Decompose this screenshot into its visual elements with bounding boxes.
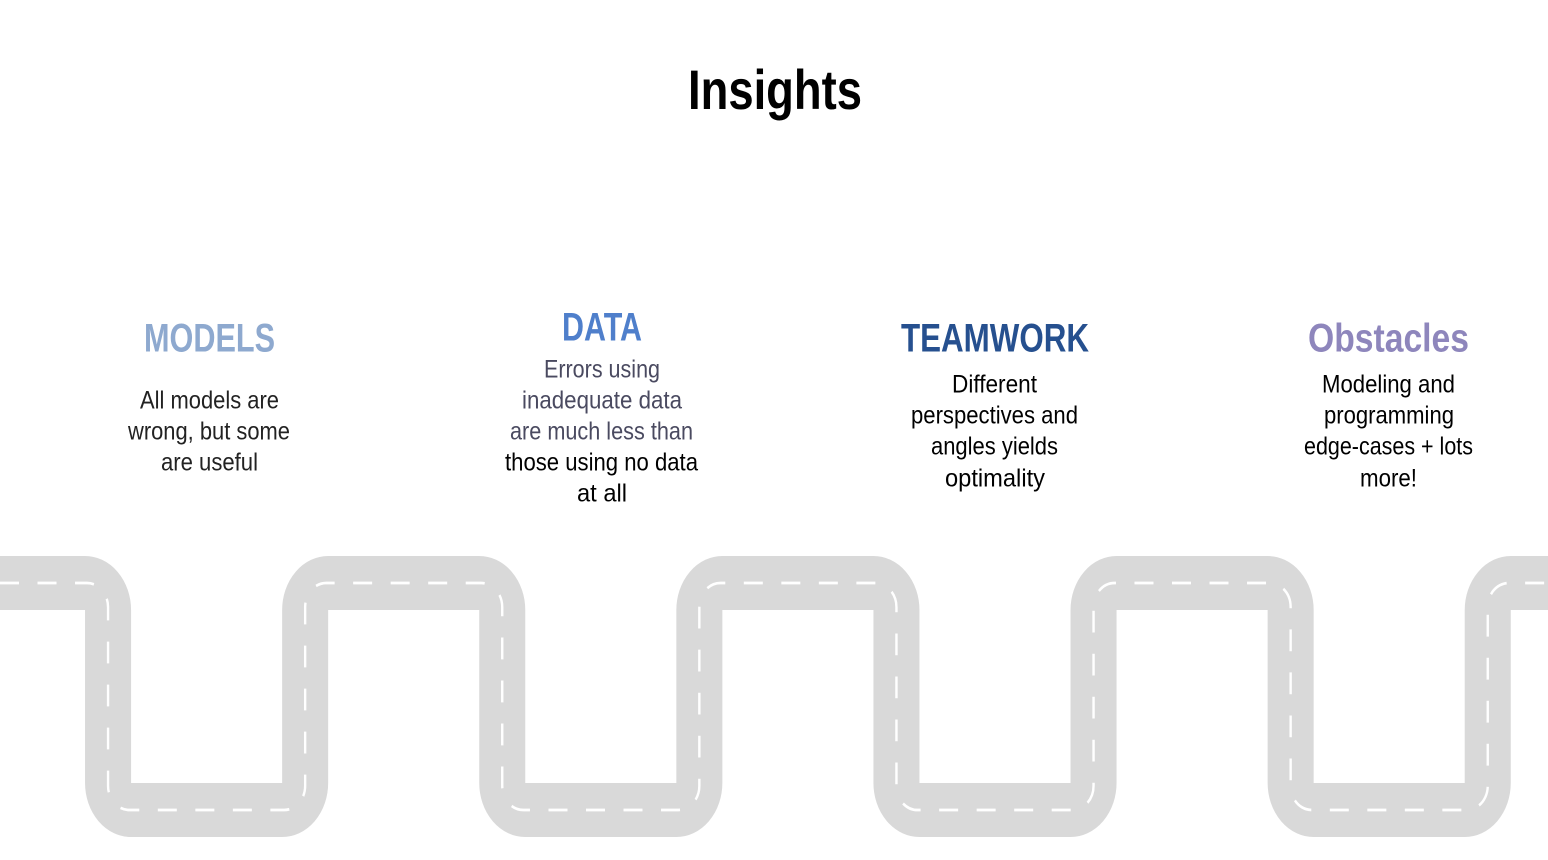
winding road <box>0 583 1548 810</box>
text block: models: are useful <box>161 448 258 476</box>
text block: obstacles <box>1304 370 1473 492</box>
text block: models <box>127 386 290 476</box>
text block: models: All models are <box>140 386 279 414</box>
text block: obstacles: programming <box>1324 402 1454 430</box>
text block: obstacles: more! <box>1360 464 1417 492</box>
road surface <box>0 583 1548 810</box>
heading: data: DATA <box>562 306 642 350</box>
heading: models: MODELS <box>144 316 275 360</box>
panel: obstacles <box>1304 316 1473 492</box>
text block: data: at all <box>577 480 627 508</box>
heading: teamwork: TEAMWORK <box>901 316 1089 360</box>
panel: teamwork <box>901 316 1089 492</box>
text block: teamwork: perspectives and <box>911 402 1078 430</box>
heading: obstacles: Obstacles <box>1308 316 1469 360</box>
text block: teamwork: optimality <box>945 464 1045 492</box>
text block: data <box>505 356 698 508</box>
text block: teamwork: Different <box>952 370 1037 398</box>
text block: data: inadequate data <box>522 386 682 414</box>
text block: teamwork <box>911 370 1078 492</box>
text block: models: wrong, but some <box>127 418 290 446</box>
text block: teamwork: angles yields <box>931 432 1058 460</box>
text block: data: those using no data <box>505 448 698 476</box>
panel: data <box>505 306 698 508</box>
panel: models <box>127 316 290 476</box>
title: Insights <box>688 58 862 121</box>
road centre dashes <box>0 583 1548 810</box>
text block: data: are much less than <box>510 418 693 446</box>
text block: data: Errors using <box>544 356 660 384</box>
text block: obstacles: Modeling and <box>1322 370 1455 398</box>
text block: obstacles: edge-cases + lots <box>1304 432 1473 460</box>
